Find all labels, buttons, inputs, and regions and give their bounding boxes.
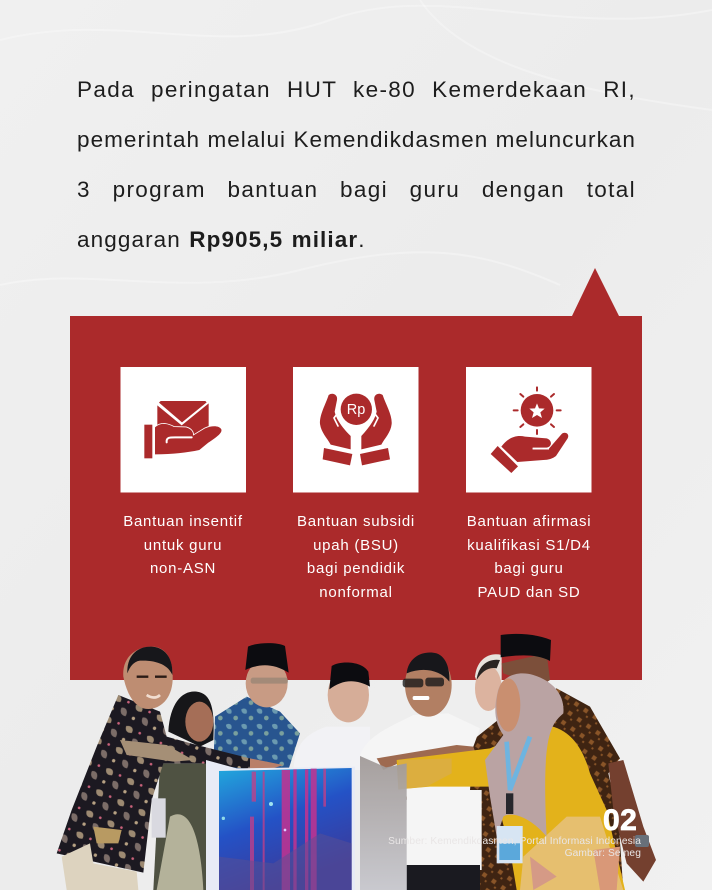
source credit: Gambar: Setneg [565,848,641,859]
photo: group of people at launch [57,634,656,890]
caption: guru non-ASN: Bantuan insentif [123,513,243,530]
caption: afirmasi: PAUD dan SD [477,584,580,601]
woman in glasses behind [475,654,502,711]
speech panel [70,268,642,680]
man with glasses and white shirt [360,652,482,890]
icon tile: hands holding rupiah coin [293,367,418,492]
transparent podium [360,756,407,890]
intro paragraph: anggaran Rp905,5 miliar. [77,227,366,252]
intro paragraph: pemerintah melalui Kemendikdasmen meluncurkan [77,127,636,152]
icon tile: star above hand [466,367,592,492]
source credit [388,836,641,859]
caption: afirmasi: bagi guru [494,560,564,577]
caption: BSU: Bantuan subsidi [297,513,415,530]
caption: BSU [297,513,415,601]
man with blue batik shirt [213,643,300,770]
launch screen [206,760,355,890]
man with black cap and white shirt [293,663,370,770]
source credit: Sumber: Kemendikdasmen, Portal Informasi Indonesia [388,836,641,847]
caption: BSU: bagi pendidik [307,560,405,577]
intro paragraph: 3 program bantuan bagi guru dengan total [77,177,636,202]
man with batik brown shirt [405,634,656,890]
caption: guru non-ASN: non-ASN [150,560,216,577]
caption: afirmasi [467,513,591,601]
caption: afirmasi: Bantuan afirmasi [467,513,591,530]
caption: afirmasi: kualifikasi S1/D4 [467,537,591,554]
page number: 02 [603,804,637,837]
caption: BSU: upah (BSU) [313,537,399,554]
caption: guru non-ASN [123,513,243,577]
intro paragraph [77,77,636,252]
icon tile: envelope in hand [120,367,246,492]
caption: guru non-ASN: untuk guru [144,537,222,554]
man with batik shirt in front [57,647,283,890]
intro paragraph: Pada peringatan HUT ke-80 Kemerdekaan RI, [77,77,636,102]
caption: BSU: nonformal [319,584,393,601]
coin label: Rp [347,402,365,418]
woman in yellow kebaya with hijab [397,673,625,890]
woman in headscarf [153,692,217,890]
